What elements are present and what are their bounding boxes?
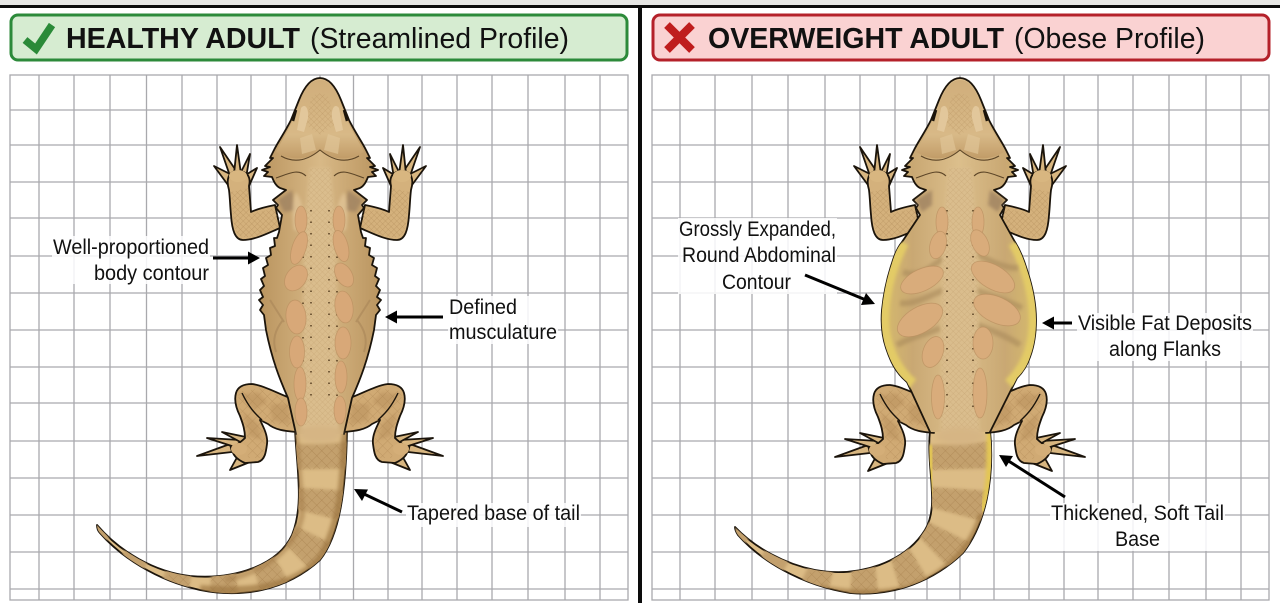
arrow: tail base: [999, 455, 1065, 497]
heading text: overweight: [708, 23, 1205, 55]
callout: abdominal contour: [678, 218, 875, 305]
heading text: healthy: [66, 23, 569, 55]
dorsal stripe: [302, 168, 338, 430]
callout: tail base: Tapered base of tail: [407, 502, 580, 525]
callout: body contour: [52, 236, 260, 285]
illustration: healthy lizard: [97, 78, 443, 593]
tail root blend: [298, 425, 342, 443]
heading banner: healthy: [11, 15, 627, 60]
heading text: overweight: (Obese Profile): [1014, 23, 1205, 55]
illustration: overweight lizard: [735, 78, 1085, 595]
heading banner: overweight: [653, 15, 1269, 60]
callout: musculature: [385, 296, 558, 344]
callout: fat deposits: Visible Fat Deposits: [1078, 312, 1252, 335]
callout: abdominal contour: Grossly Expanded,: [679, 218, 836, 241]
arrow: body contour: [213, 252, 260, 264]
shoulder shading: [916, 190, 1004, 212]
heading text: overweight: OVERWEIGHT ADULT: [708, 23, 1004, 55]
arrow: tail base: [354, 489, 402, 512]
callout: musculature: musculature: [449, 321, 557, 344]
panel: healthy adult: [10, 15, 628, 600]
body and head: [259, 78, 381, 443]
dorsal dot rows: [303, 210, 337, 425]
heading text: healthy: (Streamlined Profile): [310, 23, 569, 55]
callout: body contour: body contour: [94, 262, 209, 285]
callout: abdominal contour: Contour: [722, 271, 791, 294]
flank shadow bands: [897, 252, 1022, 345]
dorsal dot rows: [947, 210, 973, 410]
top band: [0, 0, 1280, 5]
grid background: [652, 75, 1269, 600]
top rule: [0, 5, 1280, 8]
callout: musculature: Defined: [449, 296, 517, 319]
grid background: [10, 75, 628, 600]
icon: green check mark: [25, 25, 52, 49]
callout: tail base: [999, 455, 1225, 551]
scutes: [280, 206, 357, 426]
shoulder shading: [278, 190, 362, 212]
fat deposits along flanks: [882, 242, 1036, 385]
tail root blend: [936, 427, 984, 445]
callout: body contour: Well-proportioned: [53, 236, 209, 259]
icon: red cross: [667, 25, 692, 50]
dorsal stripe: [941, 168, 979, 435]
callout: fat deposits: [1042, 312, 1253, 361]
limbs: [214, 145, 280, 240]
callout: tail base: [354, 489, 581, 527]
head markings: [916, 80, 1004, 158]
tail: [735, 425, 992, 595]
arrow: fat deposits: [1042, 316, 1072, 330]
callout: fat deposits: along Flanks: [1109, 338, 1221, 361]
body and head: [882, 78, 1036, 445]
limbs: [854, 145, 920, 240]
tail: [97, 425, 347, 593]
arrow: musculature: [385, 310, 443, 324]
scutes: [892, 207, 1025, 419]
head markings: [276, 80, 364, 158]
callout: tail base: Thickened, Soft Tail: [1051, 502, 1224, 525]
centre divider: [638, 5, 642, 603]
arrow: abdominal contour: [805, 275, 875, 305]
heading text: healthy: HEALTHY ADULT: [66, 23, 300, 55]
callout: abdominal contour: Round Abdominal: [682, 244, 836, 267]
callout: tail base: Base: [1115, 528, 1160, 551]
panel: overweight adult: [652, 15, 1269, 600]
